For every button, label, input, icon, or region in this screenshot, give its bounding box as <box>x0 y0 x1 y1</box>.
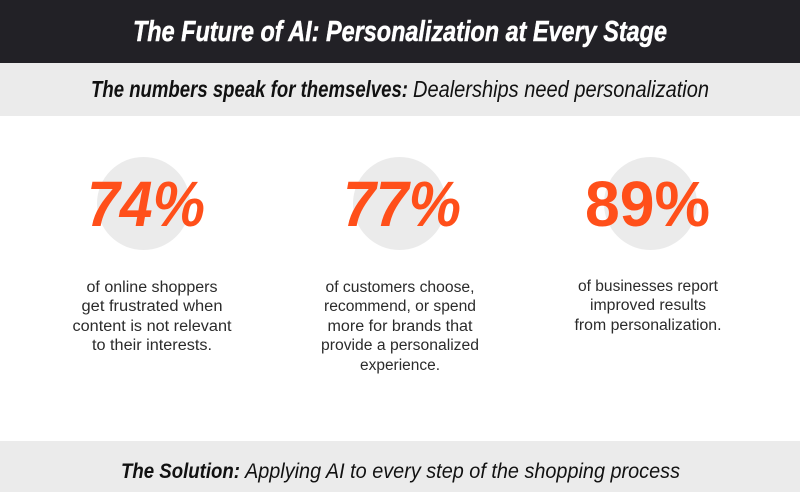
stat: 89% <box>574 157 722 334</box>
stat: 77%: recommend, or spend <box>324 298 476 315</box>
stat: 89%: improved results <box>590 297 706 314</box>
stat: 77%: experience. <box>360 357 440 374</box>
stat: 77% <box>321 157 479 374</box>
stat: 74%: 74% <box>87 168 205 240</box>
title banner: The Future of AI: Personalization at Every Stage <box>133 16 667 48</box>
stat: 89%: 89% <box>585 168 710 240</box>
solution banner <box>0 441 800 492</box>
stat: 74%: content is not relevant <box>72 318 232 335</box>
stat: 74%: of online shoppers <box>86 279 218 296</box>
stat: 77%: 77% <box>343 168 461 240</box>
stat: 74%: to their interests. <box>92 337 212 354</box>
stat: 77%: provide a personalized <box>321 337 479 354</box>
subtitle banner <box>0 63 800 116</box>
stat: 74% <box>72 157 232 354</box>
solution banner: Applying AI to every step of the shopping process <box>243 460 680 483</box>
stat: 74%: get frustrated when <box>82 298 222 315</box>
subtitle banner: The numbers speak for themselves: <box>91 76 408 102</box>
stat: 77%: more for brands that <box>328 318 473 335</box>
stat: 89%: of businesses report <box>578 278 719 295</box>
solution banner: The Solution: <box>121 460 240 483</box>
stat: 77%: of customers choose, <box>326 279 474 296</box>
stat: 89%: from personalization. <box>574 317 722 334</box>
subtitle banner: Dealerships need personalization <box>413 76 709 102</box>
title banner <box>0 0 800 63</box>
